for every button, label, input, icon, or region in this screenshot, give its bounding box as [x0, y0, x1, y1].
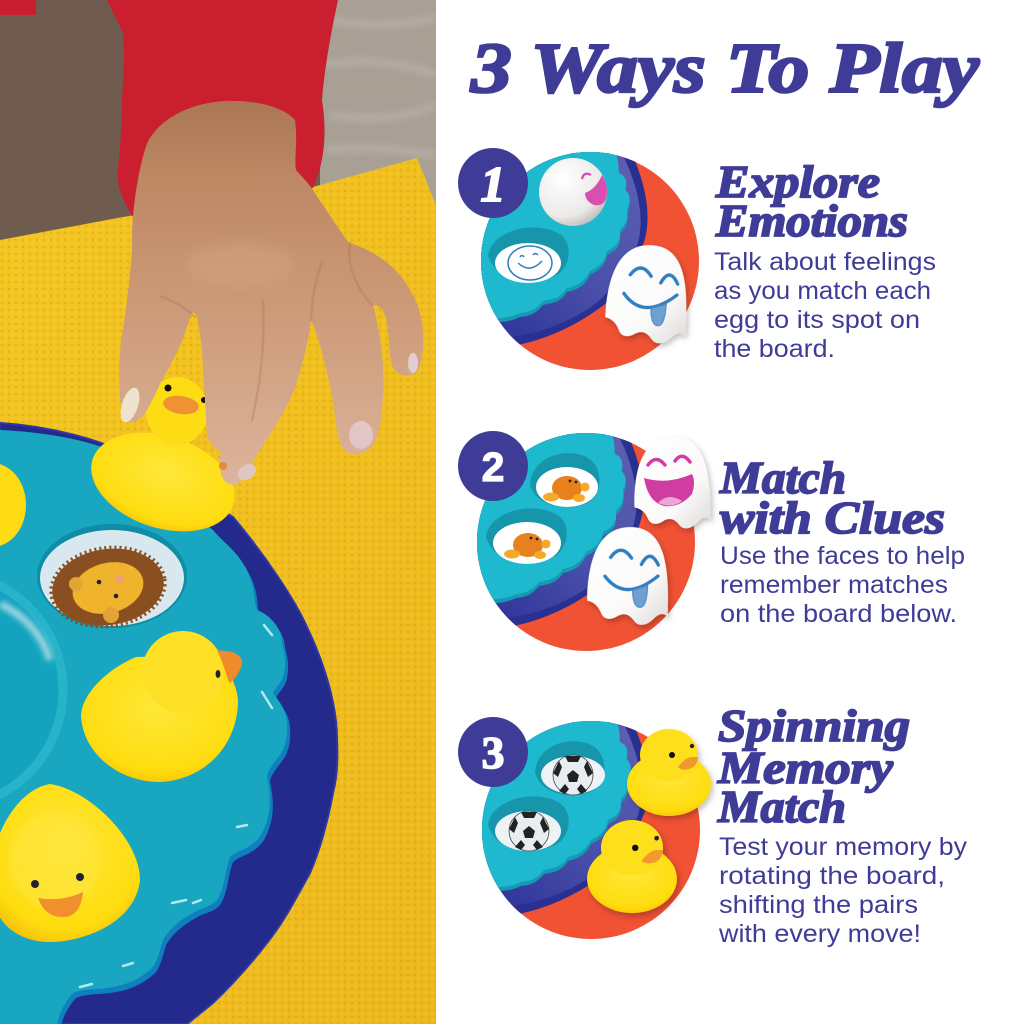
body text 2: Use the faces to help [720, 542, 965, 570]
fingernails [117, 353, 418, 483]
heading 1: Emotions [715, 196, 908, 246]
body text 2 [720, 542, 965, 628]
hand creases and shading [160, 243, 372, 420]
body text 2: remember matches [720, 571, 948, 599]
duck being held by hand [91, 377, 235, 532]
body text 3: rotating the board, [719, 862, 945, 890]
yellow woven mat [0, 158, 436, 1024]
wood table background [0, 0, 436, 260]
body text 1: egg to its spot on [714, 306, 920, 334]
body text 1: as you match each [714, 277, 931, 305]
body text 1: the board. [714, 335, 835, 363]
partial duck at left edge [0, 463, 26, 547]
body text 3: Test your memory by [719, 833, 968, 861]
section 2: match with clues [458, 427, 965, 651]
illustration circle 1 [475, 146, 699, 370]
number badge 1 [458, 148, 528, 218]
heading 3: Memory [717, 743, 894, 793]
number badge 3: 3 [482, 727, 504, 778]
title: 3 Ways To Play [470, 30, 980, 108]
child's hand [117, 101, 423, 485]
heading 2 [719, 453, 945, 543]
body text 2: on the board below. [720, 600, 957, 628]
blue game board base [0, 423, 337, 1024]
ghost egg, tongue out [604, 242, 691, 345]
heading 3 [717, 701, 910, 832]
board gloss highlights [80, 625, 272, 987]
number badge 2 [458, 431, 528, 501]
body text 1 [714, 248, 936, 363]
red sleeve [107, 0, 338, 217]
number badge 2: 2 [482, 444, 504, 490]
heading 2: with Clues [720, 493, 945, 543]
duck on board, side view [81, 631, 242, 782]
body text 1: Talk about feelings [714, 248, 936, 276]
body text 3 [718, 833, 968, 948]
body text 3: shifting the pairs [719, 891, 918, 919]
body text 3: with every move! [718, 920, 921, 948]
number badge 1: 1 [480, 156, 506, 212]
section 3: spinning memory match [458, 701, 968, 948]
hedgehog picture in board hole [37, 524, 187, 632]
teal scalloped game board [0, 430, 290, 1024]
heading 3: Match [717, 782, 846, 832]
heading 2: Match [719, 453, 846, 503]
rubber duck, upper [627, 729, 711, 816]
heading 1: Explore [715, 157, 880, 207]
heading 3: Spinning [718, 701, 910, 751]
rubber duck, lower [587, 820, 677, 913]
illustration circle 2 [471, 427, 695, 651]
number badge 3 [458, 717, 528, 787]
ghost egg, open mouth pink [634, 437, 711, 528]
ghost egg, tongue out [586, 526, 671, 626]
illustration circle 3 [476, 715, 700, 939]
photo panel: child placing duck on board [0, 0, 436, 1024]
section 1: explore emotions [458, 146, 936, 370]
duck on board, front view [0, 784, 140, 942]
central board recess [0, 572, 63, 808]
heading 1 [715, 157, 908, 246]
